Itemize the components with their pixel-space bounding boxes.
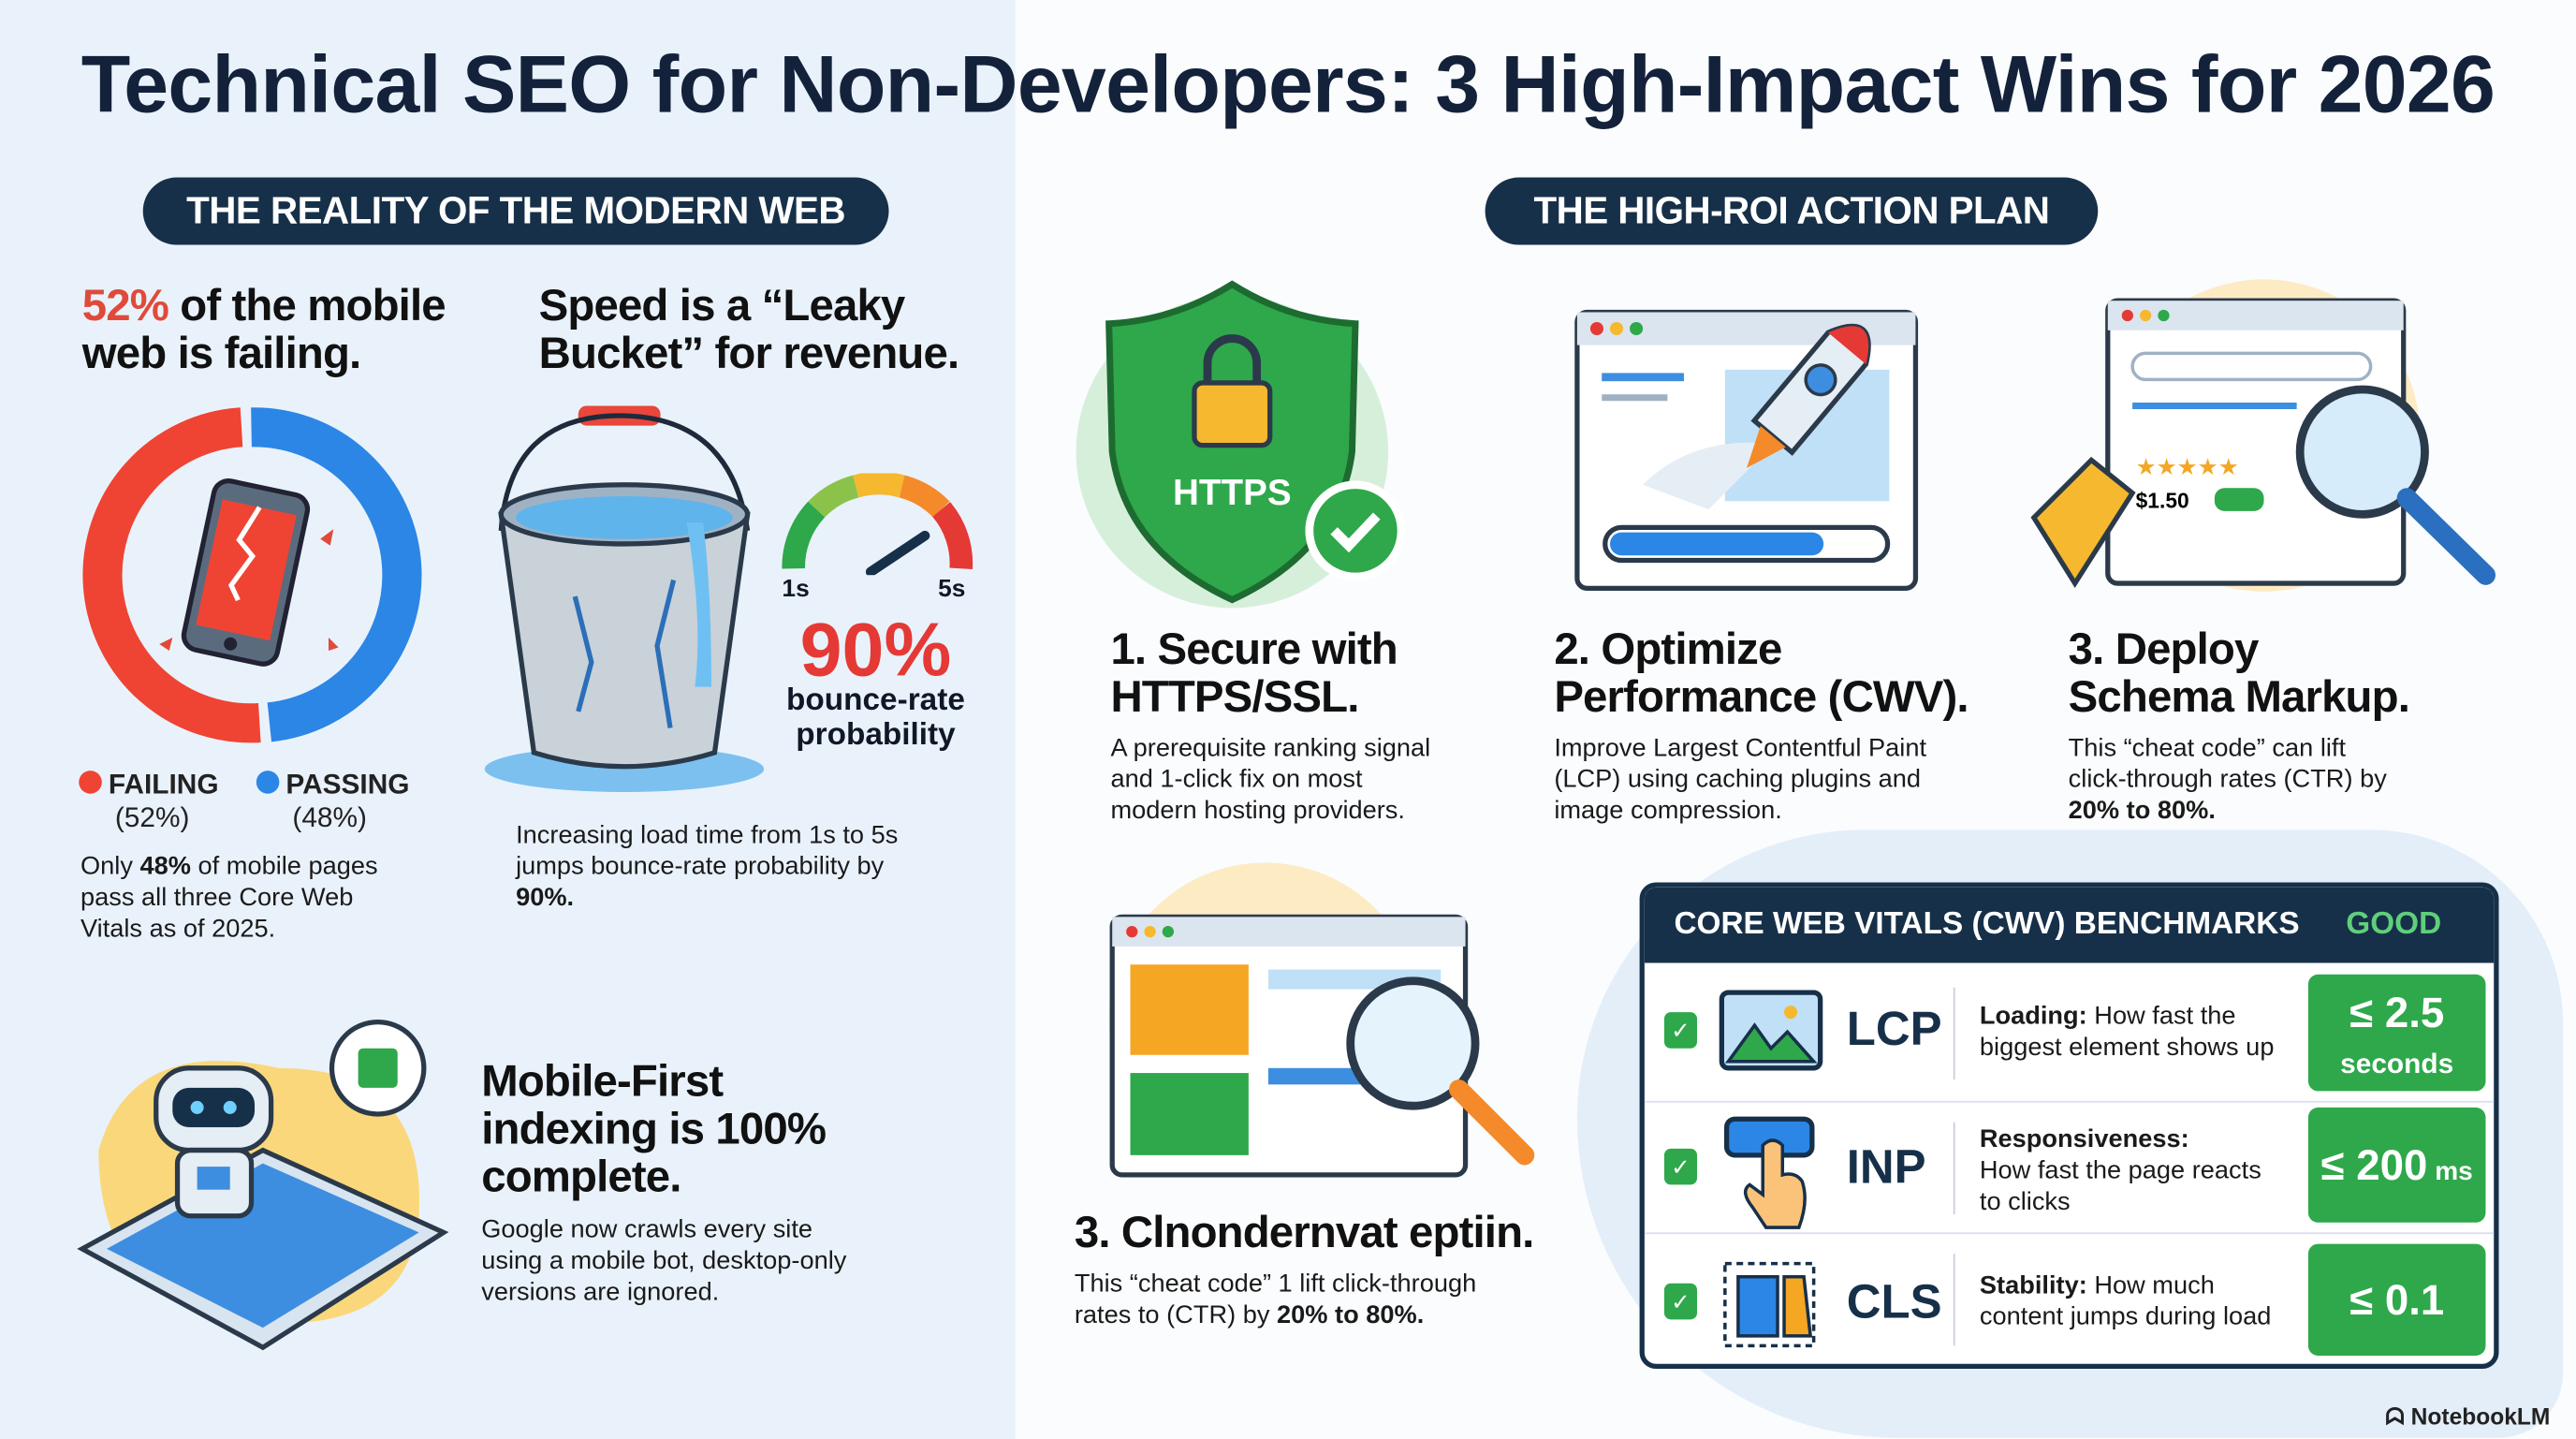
text: 48% pass: pass all three Core Web	[80, 884, 353, 912]
row: CLS: ≤ 0.1	[2349, 1275, 2444, 1325]
text: 48% pass	[80, 853, 378, 943]
heading: step 1: HTTPS/SSL.	[1110, 672, 1358, 721]
text: load time	[515, 822, 898, 912]
heading: step 2: Performance (CWV).	[1554, 672, 1969, 721]
text: step 3 variant	[1075, 1270, 1476, 1329]
icon: HTTPS shield: HTTPS	[1173, 473, 1292, 513]
panel header: CORE WEB VITALS (CWV) BENCHMARKS	[1674, 907, 2300, 942]
heading: step 2: 2. Optimize	[1554, 624, 1781, 674]
row: CLS	[1645, 1232, 2499, 1367]
heading: leaky bucket	[539, 281, 959, 378]
text: load time: 90%.	[516, 884, 574, 912]
row: LCP: ≤ 2.5	[2349, 988, 2444, 1036]
icon: leaky bucket	[485, 406, 764, 792]
text: load time: jumps bounce-rate probability by	[516, 853, 884, 881]
heading: 52% failing: 52% of the mobile	[82, 281, 446, 330]
legend: FAILING	[109, 769, 219, 800]
text: mobile bot	[481, 1216, 846, 1306]
row: LCP: LCP	[1847, 1004, 1942, 1057]
icon: HTTPS shield	[1076, 281, 1398, 609]
text: mobile bot: using a mobile bot, desktop-only	[481, 1247, 846, 1275]
donut chart	[82, 407, 421, 743]
pill: reality	[143, 178, 889, 245]
row: INP: Responsiveness:	[1980, 1125, 2189, 1153]
text: load time: Increasing load time from 1s to 5s	[516, 822, 898, 849]
text: step 3: This “cheat code” can lift	[2069, 735, 2346, 762]
text: (48%)	[292, 801, 367, 833]
row: LCP: ✓	[1671, 1017, 1690, 1043]
heading: mobile-first	[481, 1057, 826, 1201]
heading: step 1	[1110, 624, 1398, 721]
row: INP: ≤ 200 ms	[2321, 1140, 2473, 1190]
heading: step 2	[1554, 624, 1969, 721]
text: step 3: click-through rates (CTR) by	[2069, 766, 2387, 794]
icon: schema markup: $1.50	[2136, 488, 2189, 512]
heading: leaky bucket: Bucket” for revenue.	[539, 329, 959, 378]
text: 5s	[938, 575, 965, 603]
legend	[79, 769, 219, 833]
text: step 2: image compression.	[1554, 797, 1782, 825]
row: CLS: content jumps during load	[1980, 1303, 2271, 1331]
panel: core web vitals	[1640, 882, 2499, 1369]
text: step 1: A prerequisite ranking signal	[1110, 735, 1430, 762]
text: step 2	[1554, 735, 1926, 825]
heading: 52% failing	[82, 281, 446, 378]
heading: mobile-first: complete.	[481, 1152, 681, 1201]
heading: mobile-first: indexing is 100%	[481, 1104, 826, 1153]
text: step 1	[1110, 735, 1430, 825]
row: LCP: seconds	[2340, 1049, 2453, 1079]
row: CLS: ✓	[1671, 1288, 1690, 1314]
text: step 3: 20% to 80%.	[2069, 797, 2216, 825]
text: probability	[796, 718, 956, 753]
gauge	[782, 474, 973, 575]
icon: browser with magnifier	[1108, 863, 1535, 1178]
text: 48% pass: Only 48% of mobile pages	[80, 853, 378, 881]
heading: step 1: 1. Secure with	[1110, 624, 1398, 674]
row: INP: ✓	[1671, 1153, 1690, 1180]
heading: mobile-first: Mobile-First	[481, 1057, 723, 1106]
text: step 3 variant: This “cheat code” 1 lift click-through	[1075, 1270, 1476, 1299]
heading: leaky bucket: Speed is a “Leaky	[539, 281, 904, 330]
left background panel	[0, 0, 1016, 1439]
pill: action plan	[1486, 178, 2098, 245]
text: step 3 variant: rates to (CTR) by 20% to 80%.	[1075, 1301, 1424, 1329]
row: INP: INP	[1847, 1142, 1926, 1195]
row: LCP: Loading: How fast the	[1980, 1003, 2236, 1030]
panel header: GOOD	[2346, 907, 2441, 942]
text: bounce-rate	[786, 683, 965, 718]
heading: step 3	[2069, 624, 2409, 721]
icon: schema markup	[2031, 279, 2496, 592]
heading: step 3: 3. Deploy	[2069, 624, 2258, 674]
heading: step 3 variant: 3. Clnondernvat eptiin.	[1075, 1208, 1533, 1257]
legend: (52%)	[115, 801, 189, 833]
icon: performance browser rocket	[1574, 309, 1919, 591]
icon: robot on phone	[77, 1020, 449, 1350]
background blob right	[1577, 830, 2563, 1438]
heading: step 3: Schema Markup.	[2069, 672, 2409, 721]
row: INP: to clicks	[1980, 1188, 2071, 1216]
text: step 2: (LCP) using caching plugins and	[1554, 766, 1921, 794]
row: INP: How fast the page reacts	[1980, 1157, 2261, 1184]
row: CLS: CLS	[1847, 1277, 1942, 1329]
row: LCP: biggest element shows up	[1980, 1034, 2274, 1062]
heading: 52% failing: web is failing.	[82, 329, 360, 378]
title: Technical SEO for Non-Developers: 3 High-Impact Wins for 2026	[81, 41, 2495, 130]
pill: action plan: THE HIGH-ROI ACTION PLAN	[1533, 189, 2049, 231]
text: 48% pass: Vitals as of 2025.	[80, 916, 275, 943]
text: step 2: Improve Largest Contentful Paint	[1554, 735, 1926, 762]
text: step 1: and 1-click fix on most	[1110, 766, 1363, 794]
text: mobile bot: versions are ignored.	[481, 1278, 719, 1306]
panel header	[1645, 888, 2499, 962]
text: step 1: modern hosting providers.	[1110, 797, 1405, 825]
icon: cracked phone	[182, 478, 310, 667]
row: CLS: Stability: How much	[1980, 1271, 2215, 1300]
row: LCP	[1664, 974, 2486, 1092]
watermark: NotebookLM: ᗣ NotebookLM	[2385, 1403, 2550, 1430]
stat: 90%: 90%	[800, 607, 951, 692]
row: INP	[1645, 1101, 2499, 1236]
pill: reality: THE REALITY OF THE MODERN WEB	[186, 189, 845, 231]
icon: schema markup: ★★★★★	[2136, 455, 2239, 480]
text: PASSING	[285, 769, 409, 800]
text: 1s	[782, 575, 810, 603]
text: step 3	[2069, 735, 2387, 825]
text: mobile bot: Google now crawls every site	[481, 1216, 812, 1244]
